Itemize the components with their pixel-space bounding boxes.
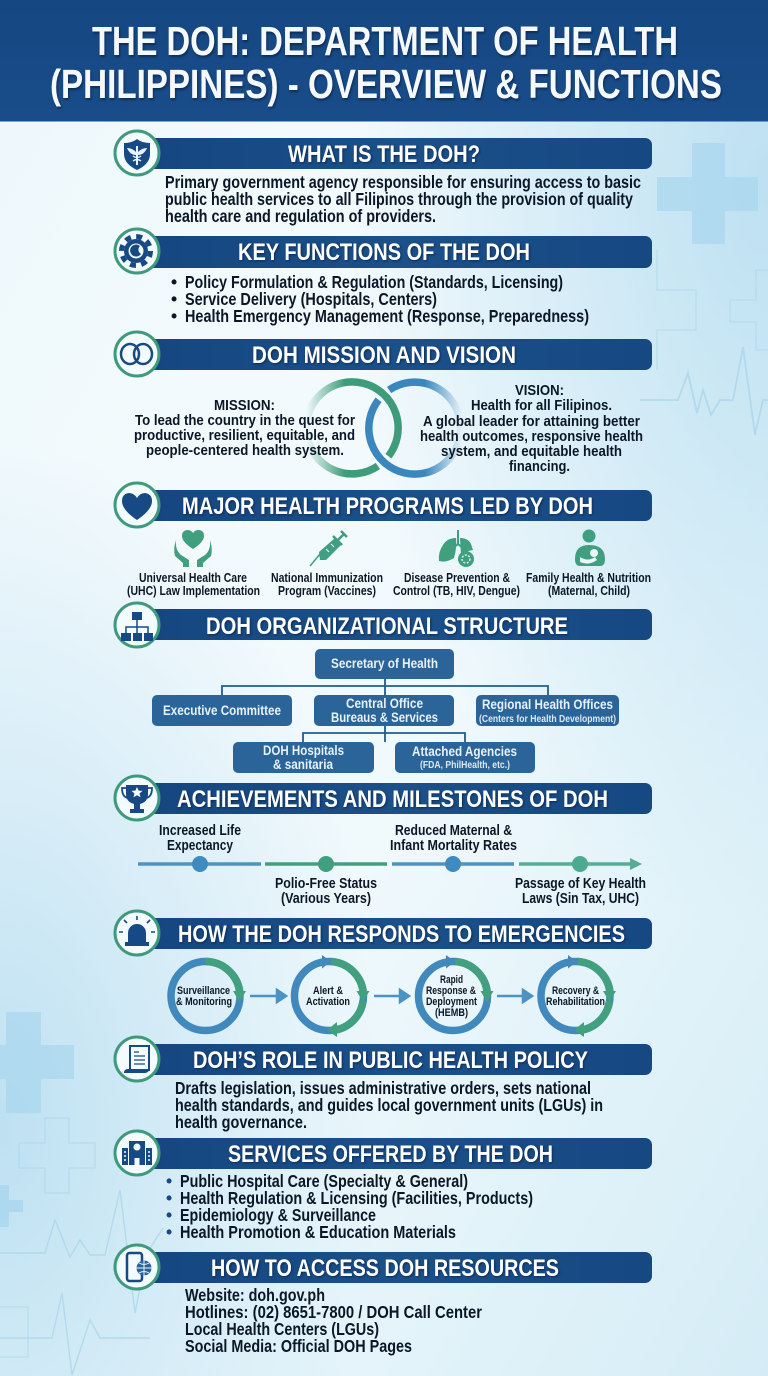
program: universal health care bbox=[127, 530, 260, 598]
list: services: Epidemiology & Surveillance bbox=[180, 1205, 376, 1225]
cycle: recovery: Recovery & bbox=[552, 985, 599, 997]
box: executive committee bbox=[152, 695, 292, 726]
cycle: rapid response: Response & bbox=[426, 985, 476, 997]
banner: services bbox=[146, 1138, 652, 1169]
text: mission: people-centered health system. bbox=[146, 442, 344, 459]
banner: what is the DOH: WHAT IS THE DOH? bbox=[288, 141, 480, 168]
icon: siren bbox=[115, 911, 159, 955]
cycle: surveillance bbox=[171, 962, 246, 1030]
banner: mission and vision bbox=[146, 339, 652, 370]
banner: mission and vision: DOH MISSION AND VISION bbox=[252, 342, 516, 369]
milestone: life expectancy: Expectancy bbox=[167, 838, 233, 854]
program: national immunization: National Immunization bbox=[271, 570, 383, 585]
text: vision: financing. bbox=[509, 458, 570, 475]
list: services: • bbox=[166, 1171, 172, 1191]
milestone: health laws: Laws (Sin Tax, UHC) bbox=[522, 891, 639, 907]
milestone: life expectancy: Increased Life bbox=[159, 823, 241, 839]
milestone: mortality rates: Reduced Maternal & bbox=[395, 823, 512, 839]
list: functions: • bbox=[171, 289, 177, 309]
list: services: Public Hospital Care (Specialty & General) bbox=[180, 1171, 468, 1191]
icon: gear bbox=[115, 229, 159, 273]
box: DOH hospitals bbox=[233, 742, 374, 773]
box: executive committee: Executive Committee bbox=[163, 702, 281, 718]
program: disease prevention bbox=[393, 530, 520, 598]
cycle: alert: Alert & bbox=[313, 985, 343, 997]
cycle: alert bbox=[294, 955, 370, 1037]
box: regional health offices: Regional Health Offices bbox=[482, 696, 613, 712]
program: universal health care: Universal Health Care bbox=[139, 570, 247, 585]
icon: linked rings bbox=[115, 332, 159, 376]
org chart connectors bbox=[222, 679, 548, 742]
icon: heart bbox=[115, 483, 159, 527]
program: disease prevention: Control (TB, HIV, Dengue) bbox=[393, 583, 520, 598]
icon: medical shield bbox=[115, 131, 159, 175]
text: vision: VISION: bbox=[515, 382, 564, 399]
banner: policy: DOH’S ROLE IN PUBLIC HEALTH POLICY bbox=[193, 1047, 588, 1074]
list: functions: • bbox=[171, 306, 177, 326]
panel: access resources bbox=[115, 1245, 652, 1356]
text: policy role bbox=[175, 1078, 603, 1132]
program: disease prevention: Disease Prevention & bbox=[404, 570, 510, 585]
cycle: recovery bbox=[541, 955, 616, 1037]
cycle: surveillance: & Monitoring bbox=[176, 996, 232, 1008]
arrow bbox=[250, 990, 286, 1002]
banner: key functions bbox=[146, 236, 652, 268]
milestone: mortality rates: Infant Mortality Rates bbox=[390, 838, 517, 854]
program: family health: Family Health & Nutrition bbox=[526, 570, 651, 585]
box: secretary of health: Secretary of Health bbox=[331, 655, 438, 671]
icon: hospital bbox=[115, 1131, 159, 1175]
list: services: • bbox=[166, 1222, 172, 1242]
text: vision: system, and equitable health bbox=[441, 443, 622, 460]
box: DOH hospitals: DOH Hospitals bbox=[263, 742, 344, 758]
banner: major health programs: MAJOR HEALTH PROGRAMS LED BY DOH bbox=[182, 493, 593, 520]
text: vision: health outcomes, responsive health bbox=[420, 428, 643, 445]
diagram: interlocking rings bbox=[306, 382, 461, 474]
text: mission bbox=[134, 397, 355, 459]
cycle: rapid response: Deployment bbox=[426, 996, 477, 1008]
milestone: polio-free: Polio-Free Status bbox=[275, 876, 377, 892]
box: attached agencies: Attached Agencies bbox=[412, 743, 517, 759]
cycle: rapid response bbox=[418, 955, 494, 1030]
text: policy role: health governance. bbox=[175, 1112, 307, 1132]
banner: key functions: KEY FUNCTIONS OF THE DOH bbox=[238, 239, 530, 266]
text: access details: Local Health Centers (LGUs) bbox=[185, 1319, 379, 1339]
list: functions: • bbox=[171, 272, 177, 292]
box: regional health offices: (Centers for Health Development) bbox=[479, 713, 616, 725]
box: attached agencies bbox=[395, 742, 535, 773]
cycle: recovery: Rehabilitation bbox=[546, 996, 605, 1008]
box: central office: Central Office bbox=[346, 695, 423, 711]
milestone: health laws bbox=[515, 876, 646, 907]
panel: major health programs bbox=[115, 483, 652, 598]
panel: services offered bbox=[115, 1131, 652, 1242]
text: description: health care and regulation of providers. bbox=[165, 206, 436, 226]
banner: emergencies: HOW THE DOH RESPONDS TO EMERGENCIES bbox=[178, 921, 625, 948]
banner: what is the DOH bbox=[146, 138, 652, 169]
list: functions: Policy Formulation & Regulation (Standards, Licensing) bbox=[185, 272, 563, 292]
text: mission: productive, resilient, equitable, and bbox=[134, 427, 355, 444]
text: mission: MISSION: bbox=[214, 397, 275, 414]
panel: public health policy bbox=[115, 1037, 652, 1132]
text: access details: Social Media: Official DOH Pages bbox=[185, 1336, 412, 1356]
box: attached agencies: (FDA, PhilHealth, etc.) bbox=[420, 759, 510, 771]
list: services: Health Promotion & Education Materials bbox=[180, 1222, 456, 1242]
cycle: rapid response: Rapid bbox=[440, 974, 463, 986]
banner: access: HOW TO ACCESS DOH RESOURCES bbox=[211, 1255, 559, 1282]
text: access details: Hotlines: (02) 8651-7800 / DOH Call Center bbox=[185, 1302, 482, 1322]
program: family health: (Maternal, Child) bbox=[548, 583, 630, 598]
banner: organizational structure: DOH ORGANIZATIONAL STRUCTURE bbox=[206, 613, 568, 640]
panel: key functions bbox=[115, 229, 652, 326]
text: access details: Website: doh.gov.ph bbox=[185, 1285, 325, 1305]
title header bbox=[0, 0, 768, 122]
text: description bbox=[165, 172, 641, 226]
panel: organizational structure bbox=[115, 603, 652, 773]
banner: services: SERVICES OFFERED BY THE DOH bbox=[228, 1141, 553, 1168]
text: vision bbox=[420, 382, 643, 475]
list: functions: Service Delivery (Hospitals, Centers) bbox=[185, 289, 437, 309]
milestone: polio-free: (Various Years) bbox=[281, 891, 371, 907]
box: central office: Bureaus & Services bbox=[331, 709, 438, 725]
list: functions: Health Emergency Management (Response, Preparedness) bbox=[185, 306, 589, 326]
cycle: rapid response: (HEMB) bbox=[435, 1007, 468, 1019]
banner: achievements: ACHIEVEMENTS AND MILESTONES OF DOH bbox=[177, 786, 608, 813]
arrow bbox=[374, 990, 409, 1002]
box: regional health offices bbox=[476, 695, 619, 726]
panel: emergency response bbox=[115, 911, 652, 1037]
cycle: alert: Activation bbox=[306, 996, 350, 1008]
list: services: • bbox=[166, 1188, 172, 1208]
icon: document scroll bbox=[115, 1037, 159, 1081]
program: universal health care: (UHC) Law Implementation bbox=[127, 583, 260, 598]
panel: mission and vision bbox=[115, 332, 652, 475]
panel: achievements and milestones bbox=[115, 776, 652, 907]
list: functions bbox=[171, 272, 589, 326]
milestone: polio-free bbox=[275, 876, 377, 907]
panel: what is the DOH bbox=[115, 131, 652, 226]
milestone: health laws: Passage of Key Health bbox=[515, 876, 646, 892]
text: description: Primary government agency responsible for ensuring access to basic bbox=[165, 172, 641, 192]
list: services: Health Regulation & Licensing (Facilities, Products) bbox=[180, 1188, 533, 1208]
box: DOH hospitals: & sanitaria bbox=[273, 756, 333, 772]
text: mission: To lead the country in the quest for bbox=[135, 412, 355, 429]
box: secretary of health bbox=[315, 649, 454, 679]
milestone: life expectancy bbox=[159, 823, 241, 854]
text: description: public health services to all Filipinos through the provision of quality bbox=[165, 189, 633, 209]
text: access details bbox=[185, 1285, 482, 1356]
program: family health bbox=[526, 530, 651, 598]
milestone: mortality rates bbox=[390, 823, 517, 854]
cycle: surveillance: Surveillance bbox=[177, 985, 230, 997]
list: services: • bbox=[166, 1205, 172, 1225]
text: policy role: Drafts legislation, issues administrative orders, sets national bbox=[175, 1078, 591, 1098]
icon: org chart bbox=[115, 603, 159, 647]
timeline bbox=[138, 856, 642, 872]
program: national immunization bbox=[271, 531, 383, 598]
box: central office bbox=[314, 695, 454, 726]
list: services bbox=[166, 1171, 533, 1242]
icon: trophy bbox=[115, 776, 159, 820]
text: vision: Health for all Filipinos. bbox=[471, 397, 612, 414]
program: national immunization: Program (Vaccines) bbox=[278, 583, 376, 598]
text: policy role: health standards, and guides local government units (LGUs) in bbox=[175, 1095, 603, 1115]
text: vision: A global leader for attaining better bbox=[423, 413, 640, 430]
icon: phone and globe bbox=[115, 1245, 159, 1289]
arrow bbox=[497, 990, 532, 1002]
